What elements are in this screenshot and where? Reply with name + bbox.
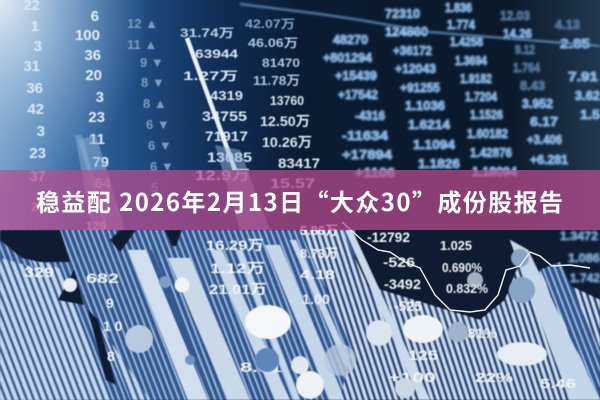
lower numbers: 9 (106, 295, 114, 311)
blurred number columns on the right: 1.18094 (472, 164, 518, 179)
trading row pink tint under band: 21 (31, 200, 45, 214)
number column 1: 31 (23, 58, 40, 75)
number column 1: 3 (34, 38, 42, 55)
blurred number columns on the right: 1.1826 (418, 156, 460, 171)
blurred number columns on the right: +3.406 (527, 132, 562, 147)
number column 2: 100 (75, 27, 100, 44)
blurred number columns on the right: 1.836 (445, 0, 472, 15)
number column 1: 37 (29, 168, 46, 185)
lower numbers: 21.01万 (209, 281, 267, 297)
lower numbers: 329 (24, 264, 54, 280)
lower numbers: 16.29万 (206, 237, 264, 253)
trading row pink tint under band: 129 (86, 219, 106, 233)
lower numbers: 4.18 (300, 267, 335, 282)
top glare line on the right (240, 4, 600, 46)
blurred number columns on the right: 1.4258 (450, 34, 483, 49)
number column 4: 12.9万 (195, 167, 250, 183)
blurred number columns on the right: 1.7204 (465, 89, 498, 104)
blurred number columns on the right: -4316 (355, 108, 385, 123)
blurred numbers in dark right area (560, 229, 600, 285)
number column 2: 23 (88, 109, 105, 126)
number column 5: 13760 (270, 93, 304, 108)
number column 4: 31.74万 (180, 26, 234, 40)
blurred number columns on the right: 14.26 (503, 26, 532, 41)
blurred number columns on the right: 3.952 (522, 96, 553, 111)
blurred number columns on the right: 1.9182 (460, 71, 492, 86)
number column 2 (75, 8, 112, 192)
blurred number columns on the right: 6.17 (530, 114, 558, 129)
lower numbers: 8 (107, 348, 115, 364)
number column 5: 81470 (262, 56, 300, 70)
title: 稳益配 2026年2月13日“大众30”成份股报告 (36, 183, 563, 218)
number column 5: 42.07万 (245, 17, 295, 31)
blurred number columns on the right: +36172 (393, 43, 432, 58)
lower numbers: -12792 (367, 229, 410, 245)
blurred number columns on the right: +15439 (335, 68, 377, 83)
blurred number columns on the right: 9.12 (515, 42, 535, 57)
lower numbers: 125 (408, 347, 438, 363)
number column 2: 3 (96, 89, 104, 106)
number column 5: 10.26万 (262, 134, 312, 150)
blurred number columns on the right: +91255 (400, 80, 440, 95)
number column 5 (245, 17, 320, 191)
number column 2: 6 (91, 8, 99, 25)
lower numbers: 1.025 (440, 238, 472, 253)
number column 4: 13085 (207, 149, 252, 165)
number column 3 with arrows: 9 ▼ (140, 55, 164, 70)
lower numbers: 5.46 (540, 376, 576, 391)
lower numbers: 0.832% (446, 281, 488, 296)
blurred number columns on the right: -11634 (342, 128, 389, 143)
number column 4: 34755 (202, 108, 247, 124)
lower numbers: 1.00 (302, 291, 330, 307)
number column 4: 4319 (210, 88, 243, 103)
blurred numbers in dark right area: 1.3472 (560, 229, 598, 243)
number column 3 with arrows: 8 ▼ (141, 75, 165, 90)
number column 3 with arrows: 5 (151, 180, 158, 195)
number column 1: 36 (26, 80, 43, 97)
number column 2: 11 (89, 131, 105, 148)
number column 1: 1 (31, 18, 39, 35)
lower numbers: -525 (394, 298, 422, 314)
number column 4: 63944 (195, 47, 238, 61)
blurred number columns on the right: 1.42876 (470, 145, 512, 160)
blurred number columns on the right: 48270 (333, 32, 368, 47)
number column 3 with arrows: 6 ▼ (148, 138, 172, 153)
lower numbers: 5.86万 (300, 223, 338, 238)
lower numbers: 1 0 (103, 318, 123, 334)
number column 3 with arrows (127, 16, 174, 195)
blurred number columns on the right: 1.6214 (408, 117, 451, 132)
number column 3 with arrows: 8 ▲ (143, 96, 167, 111)
lower numbers: -3492 (384, 276, 421, 292)
blurred numbers in dark right area: 1.742 (570, 271, 600, 285)
number column 1: 3 (37, 123, 45, 140)
blurred number columns on the right: 12.03 (500, 8, 530, 23)
blurred number columns on the right: 1.60182 (467, 126, 508, 141)
number column 1: 42 (27, 101, 44, 118)
number column 3 with arrows: 6 ▼ (150, 159, 174, 174)
lower bar chart: right group (300, 230, 600, 400)
lower numbers: 22% (475, 370, 514, 385)
pink title band (0, 170, 600, 230)
blurred number columns on the right: 1.3694 (455, 53, 488, 68)
white bokeh blobs (63, 249, 547, 399)
number column 3 with arrows: 12 ▲ (127, 16, 158, 31)
blurred number columns on the right: 3.62 (575, 88, 600, 103)
number column 2: 64 (94, 175, 112, 192)
blurred number columns on the right: 7.91 (568, 69, 598, 84)
lower numbers: +100 (388, 369, 436, 385)
number column 5: 11.78万 (253, 73, 300, 88)
number column 3 with arrows: 11 ▲ (127, 37, 157, 52)
lower numbers: 682 (86, 270, 119, 286)
blurred number columns on the right: 124860 (385, 24, 428, 39)
number column 1: 23 (29, 145, 46, 162)
blurred number columns on the right: 1.774 (447, 17, 476, 32)
blurred number columns on the right: +1106 (355, 165, 395, 180)
number column 4: 71917 (205, 128, 248, 144)
blurred number columns on the right (323, 0, 600, 180)
number column 1 (23, 0, 46, 185)
number column 5: 12.50万 (260, 113, 310, 129)
blurred number columns on the right: +801294 (323, 50, 373, 65)
blurred numbers in dark right area: 1.086 (568, 251, 600, 265)
blurred number columns on the right: 4.13 (555, 17, 580, 32)
blurred number columns on the right: 72310 (385, 6, 420, 21)
lower bar chart: dark gaps (0, 230, 182, 385)
number column 5: 15.57 (270, 175, 315, 191)
number column 2: 20 (85, 67, 102, 84)
trading row pink tint under band (31, 200, 106, 233)
blurred number columns on the right: 2.85 (560, 36, 590, 51)
number column 2: 79 (92, 154, 109, 171)
lower numbers: 0.81% (455, 325, 498, 341)
lower numbers: 8.73万 (300, 246, 338, 261)
blurred number columns on the right: 1.1036 (405, 98, 445, 113)
white diagonal trend bar (187, 38, 235, 170)
white price trend line (342, 222, 590, 312)
blurred number columns on the right: 8.43 (520, 78, 545, 93)
number column 5: 46.06万 (248, 36, 298, 50)
lower numbers: -526 (383, 254, 415, 270)
faint bars in left column area (75, 135, 270, 230)
blurred number columns on the right: +17894 (342, 147, 393, 162)
lower numbers (24, 223, 576, 391)
lower numbers: 8.61 (240, 359, 282, 375)
lower bar chart: left group (0, 230, 368, 400)
number column 3 with arrows: 6 ▼ (146, 117, 170, 132)
number column 4 (180, 26, 252, 183)
number column 2: 36 (84, 47, 101, 64)
number column 5: 83417 (278, 155, 320, 171)
blurred number columns on the right: 1.764 (513, 60, 541, 75)
blurred number columns on the right: 1.1094 (413, 137, 456, 152)
lower numbers: 0.690% (442, 260, 482, 275)
lower numbers: 1.12万 (210, 260, 265, 276)
blurred number columns on the right: +17542 (338, 87, 378, 102)
blurred number columns on the right: +6.281 (530, 152, 568, 167)
blurred number columns on the right: 1.5 (580, 107, 600, 122)
blurred number columns on the right: 1.1526 (470, 107, 503, 122)
blurred number columns on the right: +12043 (395, 61, 436, 76)
number column 4: 1.27万 (183, 69, 238, 83)
